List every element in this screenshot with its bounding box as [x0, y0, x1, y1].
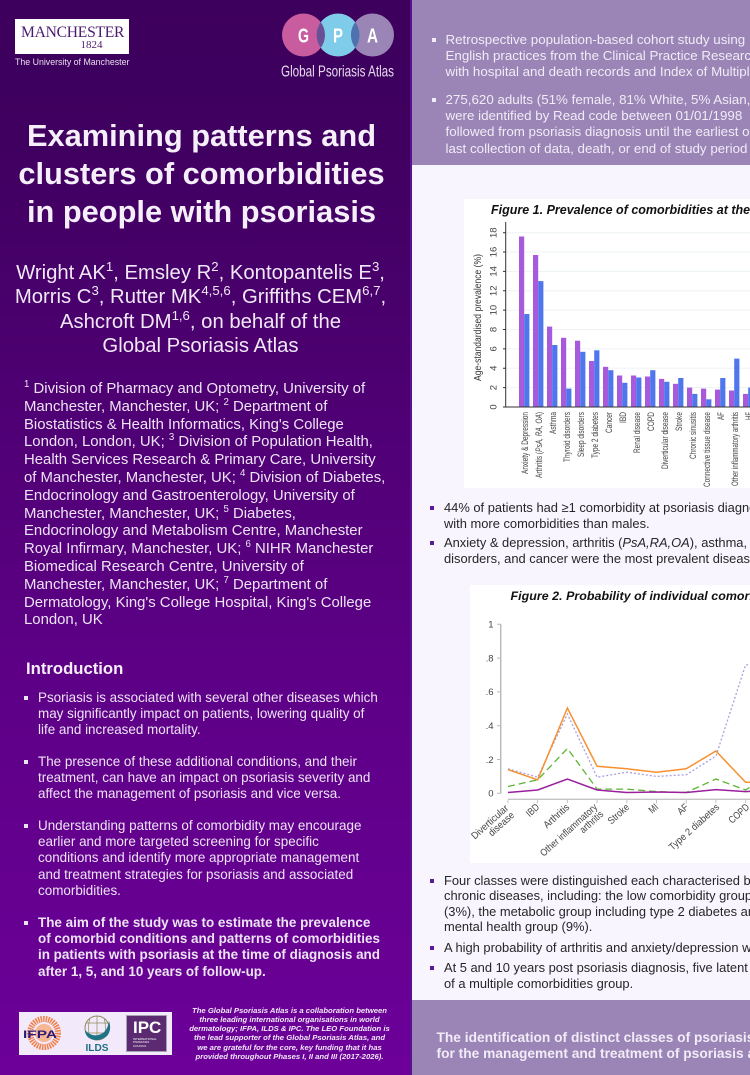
line chart: probability of individual comorbidities: arthritis	[578, 809, 606, 836]
text block: study aim	[38, 915, 380, 980]
bar chart: prevalence of comorbidities: Asthma	[548, 412, 559, 434]
logo: University of Manchester: 1824	[80, 39, 102, 51]
text block: population: 275,620 adults (51% female, 81% White, 5% Asian,	[446, 92, 750, 107]
logo: University of Manchester: The University of Manchester	[15, 57, 129, 67]
bar chart: prevalence of comorbidities: Chronic sinusitis	[688, 412, 699, 459]
panel: conclusion band	[412, 1000, 750, 1075]
logo: Global Psoriasis Atlas: G	[298, 26, 309, 48]
text block: conclusion	[436, 1030, 750, 1061]
affiliations: London, London, UK; 3 Division of Population Health,	[24, 432, 373, 450]
line chart: probability of individual comorbidities: Diverticular	[470, 803, 511, 842]
text block: intro bullet 3: Understanding patterns of comorbidity may encourage	[38, 818, 361, 833]
bar chart: prevalence of comorbidities: Age-standardised prevalence (%)	[472, 254, 484, 381]
text block: intro bullet 2	[38, 754, 370, 803]
authors	[15, 259, 386, 357]
text block: intro bullet 3: and treatment strategies for psoriasis and associated	[38, 867, 353, 882]
bar chart: prevalence of comorbidities: 4	[488, 366, 500, 371]
icon: IPC: IPC	[133, 1018, 161, 1037]
text block: study design: Retrospective population-based cohort study using	[446, 32, 745, 47]
text block: follow-up finding: of a multiple comorbidities group.	[444, 976, 633, 991]
line chart: probability of individual comorbidities: 0	[488, 788, 494, 800]
line chart: probability of individual comorbidities: .8	[486, 654, 494, 664]
text block: study aim: after 1, 5, and 10 years of follow-up.	[38, 964, 266, 979]
bar chart: prevalence of comorbidities: Cancer	[604, 412, 615, 433]
line chart: probability of individual comorbidities	[470, 620, 750, 859]
text block: GPA collaboration note: provided throughout Phases I, II and III (2017-2026).	[196, 1052, 383, 1061]
authors: Global Psoriasis Atlas	[102, 335, 299, 357]
text block: prevalence finding 1: with more comorbidities than males.	[444, 516, 650, 531]
icon: IPC: COUNCIL	[133, 1044, 147, 1048]
line chart: probability of individual comorbidities: disease	[487, 810, 517, 839]
text block: population	[446, 92, 750, 157]
bar chart: prevalence of comorbidities: Arthritis (PsA, RA, OA)	[534, 412, 545, 478]
text block: population: followed from psoriasis diagnosis until the earliest of	[446, 124, 750, 139]
logo: University of Manchester	[15, 19, 130, 67]
authors: Morris C3, Rutter MK4,5,6, Griffiths CEM6,7,	[15, 283, 386, 308]
text block: study aim: The aim of the study was to estimate the prevalence	[38, 915, 370, 930]
logos: partner organisations	[19, 1012, 172, 1055]
bar chart: prevalence of comorbidities: AF	[716, 412, 727, 420]
text block: conclusion: The identification of distinct classes of psoriasis	[436, 1030, 750, 1045]
affiliations: 1 Division of Pharmacy and Optometry, University of	[24, 379, 365, 397]
line chart: probability of individual comorbidities: .6	[486, 687, 494, 698]
text block: prevalence finding 1	[444, 500, 750, 532]
line chart: probability of individual comorbidities: 1	[488, 620, 494, 630]
bar chart: prevalence of comorbidities: Type 2 diabetes	[590, 412, 601, 458]
bar chart: prevalence of comorbidities	[472, 222, 750, 487]
panel: methods band	[412, 0, 750, 165]
text block: population: last collection of data, death, or end of study period	[446, 141, 747, 156]
line chart: probability of individual comorbidities: IBD	[524, 802, 542, 820]
line chart: probability of individual comorbidities: .4	[486, 721, 494, 732]
affiliations: Health Services Research & Primary Care, University	[24, 452, 376, 468]
bar chart: prevalence of comorbidities: Sleep disorders	[576, 412, 587, 457]
affiliations: Manchester, Manchester, UK; 7 Department of	[24, 575, 327, 593]
text block: latent classes: mental health group (9%).	[444, 919, 592, 934]
text block: intro bullet 2: The presence of these additional conditions, and their	[38, 754, 357, 769]
icon: IPC: PSORIASIS	[133, 1040, 149, 1044]
line chart: probability of individual comorbidities: Other inflammatory	[538, 802, 600, 859]
icon: ILDS	[84, 1016, 110, 1053]
title: Examining patterns and	[27, 118, 376, 153]
affiliations: Endocrinology and Gastroenterology, University of	[24, 488, 355, 504]
panel: figure 2	[470, 585, 750, 863]
authors: Ashcroft DM1,6, on behalf of the	[60, 308, 341, 333]
affiliations: Manchester, Manchester, UK; 2 Department of	[24, 397, 327, 415]
affiliations	[24, 379, 385, 628]
text block: GPA collaboration note: The Global Psoriasis Atlas is a collaboration between	[192, 1006, 387, 1014]
icon: IPC: INTERNATIONAL	[133, 1037, 157, 1041]
text block: prevalence finding 2	[444, 535, 750, 567]
text block: study aim: of comorbid conditions and patterns of comorbidities	[38, 931, 380, 946]
bar chart: prevalence of comorbidities: Thyroid disorders	[562, 412, 573, 462]
affiliations: Biostatistics & Health Informatics, King's College	[24, 417, 344, 433]
title: in people with psoriasis	[27, 194, 376, 229]
bar chart: prevalence of comorbidities: Diverticular disease	[660, 412, 671, 469]
icon: IFPA	[23, 1016, 61, 1050]
series: metabolic class	[508, 748, 750, 792]
bar chart: prevalence of comorbidities: Anxiety & Depression	[520, 412, 531, 474]
text block: intro bullet 1: Psoriasis is associated with several other diseases which	[38, 690, 378, 705]
text block: follow-up finding	[444, 960, 750, 991]
bar chart: prevalence of comorbidities: 16	[488, 247, 500, 257]
bar chart: prevalence of comorbidities: 12	[488, 286, 500, 296]
text block: study aim: in patients with psoriasis at the time of diagnosis and	[38, 947, 380, 962]
bar chart: prevalence of comorbidities: Other inflammatory arthritis	[730, 412, 741, 486]
text block: GPA collaboration note	[189, 1006, 390, 1061]
text block: population: were identified by Read code between 01/01/1998	[446, 108, 742, 123]
affiliations: of Manchester, Manchester, UK; 4 Division of Diabetes,	[24, 468, 385, 486]
text block: intro bullet 3: comorbidities.	[38, 883, 121, 898]
line chart: probability of individual comorbidities: Arthritis	[542, 802, 572, 831]
series: high comorbidity class	[508, 708, 750, 782]
text block: GPA collaboration note: three leading international organisations in world	[199, 1015, 380, 1024]
affiliations: Biomedical Research Centre, University of	[24, 559, 304, 575]
heading: Introduction: Introduction	[26, 659, 123, 678]
text block: intro bullet 1: life and increased mortality.	[38, 722, 201, 737]
logo: University of Manchester: MANCHESTER	[21, 24, 124, 41]
text block: intro bullet 3: conditions and identify more appropriate management	[38, 850, 359, 865]
logo: Global Psoriasis Atlas: A	[367, 26, 378, 48]
bar chart: prevalence of comorbidities: Stroke	[674, 412, 685, 431]
text block: intro bullet 3: earlier and more targeted screening for specific	[38, 834, 319, 849]
affiliations: Endocrinology and Metabolism Centre, Manchester	[24, 523, 363, 539]
text block: study design	[446, 32, 750, 81]
text block: intro bullet 1: may significantly impact on patients, lowering quality of	[38, 706, 364, 721]
text block: latent classes	[444, 873, 750, 934]
bar chart: prevalence of comorbidities: 8	[488, 327, 500, 332]
bar chart: prevalence of comorbidities: 18	[488, 227, 500, 238]
bar chart: prevalence of comorbidities: Connective tissue disease	[702, 412, 713, 487]
line chart: probability of individual comorbidities: .2	[486, 755, 494, 766]
title: clusters of comorbidities	[18, 156, 385, 191]
bar chart: prevalence of comorbidities: 0	[488, 404, 500, 410]
text block: latent classes: chronic diseases, including: the low comorbidity group	[444, 888, 750, 903]
affiliations: London, UK	[24, 612, 103, 628]
panel: left column	[0, 0, 412, 1075]
text block: latent classes: Four classes were distinguished each characterised by	[444, 873, 750, 888]
panel: figure 1	[464, 199, 750, 488]
line chart: probability of individual comorbidities: Type 2 diabetes	[667, 802, 722, 853]
authors: Wright AK1, Emsley R2, Kontopantelis E3,	[16, 259, 385, 284]
affiliations: Manchester, Manchester, UK; 5 Diabetes,	[24, 504, 296, 522]
text block: GPA collaboration note: we are grateful for the core, key funding that it has	[197, 1043, 382, 1052]
series: low comorbidity class	[508, 779, 750, 792]
bar chart: prevalence of comorbidities: 14	[488, 266, 500, 277]
icon: IPC	[127, 1016, 166, 1051]
text block: intro bullet 1	[38, 690, 378, 739]
affiliations: Royal Infirmary, Manchester, UK; 6 NIHR Manchester	[24, 539, 373, 557]
bar chart: prevalence of comorbidities: 10	[488, 305, 500, 315]
logo: Global Psoriasis Atlas	[281, 14, 394, 80]
bar chart: prevalence of comorbidities: 2	[488, 385, 500, 390]
text block: intro bullet 3	[38, 818, 361, 899]
affiliations: Dermatology, King's College Hospital, King's College	[24, 595, 371, 611]
logo: Global Psoriasis Atlas: P	[333, 26, 343, 48]
bar chart: prevalence of comorbidities: IBD	[618, 412, 629, 423]
bar chart: prevalence of comorbidities: 6	[488, 346, 500, 352]
text block: GPA collaboration note: the lead supporter of the Global Psoriasis Atlas, and	[194, 1033, 385, 1042]
bar chart: prevalence of comorbidities: COPD	[646, 412, 657, 431]
icon: IFPA: IFPA	[23, 1029, 57, 1041]
text block: study design: English practices from the Clinical Practice Research	[446, 48, 750, 63]
series: mental health class	[508, 665, 750, 777]
line chart: probability of individual comorbidities: AF	[675, 802, 691, 818]
text block: study design: with hospital and death records and Index of Multiple	[446, 64, 750, 79]
line chart: probability of individual comorbidities: Stroke	[606, 802, 632, 827]
text block: GPA collaboration note: dermatology; IFPA, ILDS & IPC. The LEO Foundation is	[189, 1024, 390, 1033]
bar chart: prevalence of comorbidities: Renal disease	[632, 412, 643, 453]
text block: intro bullet 2: affect the management of psoriasis and vice versa.	[38, 786, 341, 801]
line chart: probability of individual comorbidities: MI	[647, 802, 661, 816]
title	[18, 118, 385, 229]
text block: intro bullet 2: treatment, can have an impact on psoriasis severity and	[38, 770, 370, 785]
